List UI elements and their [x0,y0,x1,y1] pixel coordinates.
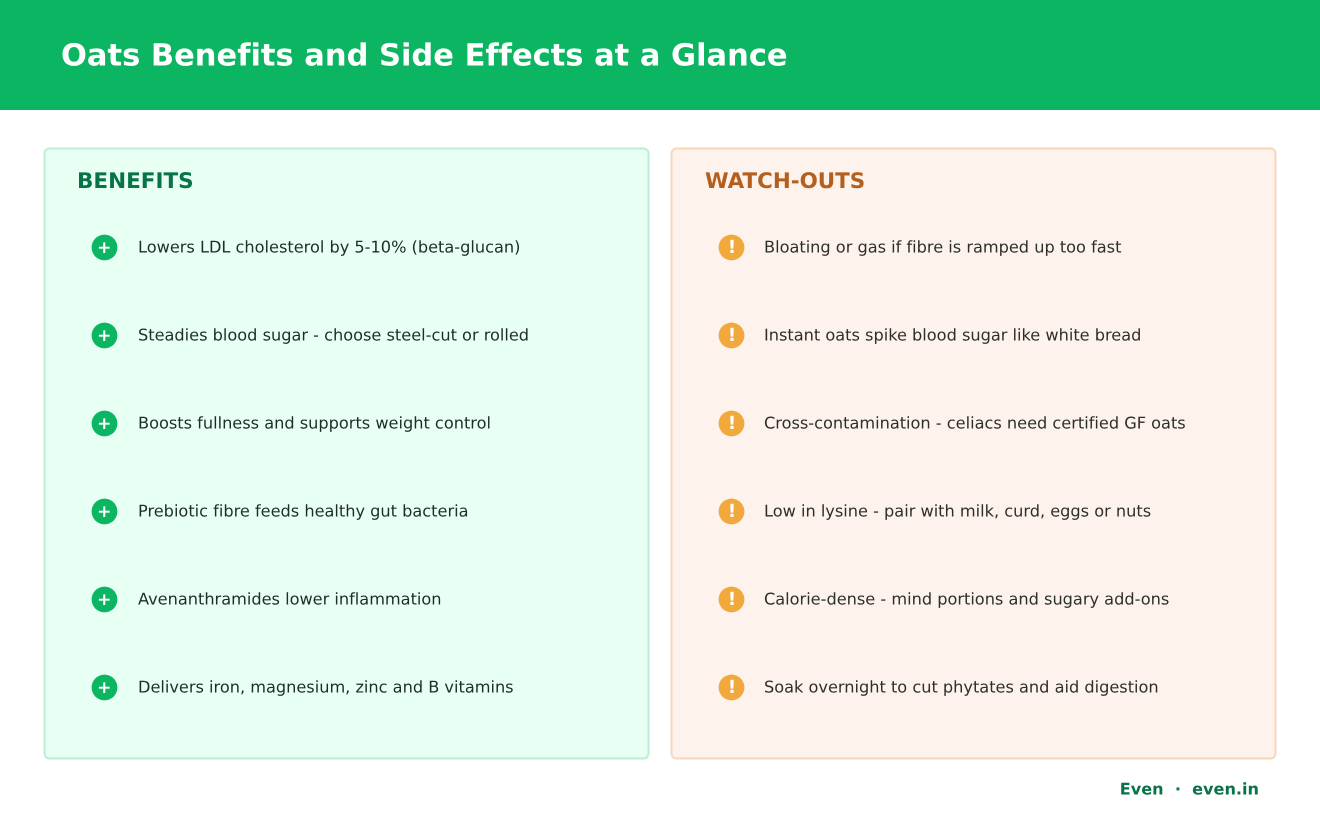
watch-out 6: Soak overnight to cut phytates and aid digestion [764,678,1159,696]
watch-out 5 [719,587,1169,612]
benefit 5: + [97,590,111,610]
watch-out 3: Cross-contamination - celiacs need certified GF oats [764,414,1186,432]
watch-out 4 [719,499,1151,524]
watch-out 3: ! [728,413,736,434]
heading: watch-outs: WATCH-OUTS [705,169,865,194]
heading: benefits: BENEFITS [77,169,194,194]
watch-out 5: Calorie-dense - mind portions and sugary add-ons [764,590,1169,608]
benefit 4: Prebiotic fibre feeds healthy gut bacteria [138,502,468,520]
benefit 6: Delivers iron, magnesium, zinc and B vitamins [138,678,514,696]
title: Oats Benefits and Side Effects at a Glance [61,38,788,74]
benefit 4: + [97,502,111,522]
watch-out 6 [719,675,1159,700]
watch-out 2 [719,323,1141,348]
benefit 5: Avenanthramides lower inflammation [138,590,442,608]
benefit 2 [92,323,529,348]
panel: benefits [44,148,648,758]
benefit 2: Steadies blood sugar - choose steel-cut or rolled [138,326,529,344]
watch-out 4: ! [728,501,736,522]
benefit 1 [92,235,520,260]
watch-out 1 [719,235,1121,260]
footer credit: Even · even.in [1120,780,1259,798]
benefit 1: + [97,238,111,258]
watch-out 1: ! [728,237,736,258]
panel: watch-outs [672,148,1276,758]
watch-out 2: ! [728,325,736,346]
watch-out 1: Bloating or gas if fibre is ramped up too fast [764,238,1121,256]
watch-out 3 [719,411,1186,436]
watch-out 4: Low in lysine - pair with milk, curd, eggs or nuts [764,502,1151,520]
watch-out 6: ! [728,677,736,698]
benefit 3: Boosts fullness and supports weight control [138,414,491,432]
benefit 5 [92,587,442,612]
benefit 6: + [97,678,111,698]
watch-out 5: ! [728,589,736,610]
benefit 3: + [97,414,111,434]
benefit 2: + [97,326,111,346]
watch-out 2: Instant oats spike blood sugar like white bread [764,326,1141,344]
benefit 1: Lowers LDL cholesterol by 5-10% (beta-glucan) [138,238,520,256]
benefit 3 [92,411,491,436]
benefit 4 [92,499,468,524]
header banner [0,0,1320,110]
benefit 6 [92,675,514,700]
